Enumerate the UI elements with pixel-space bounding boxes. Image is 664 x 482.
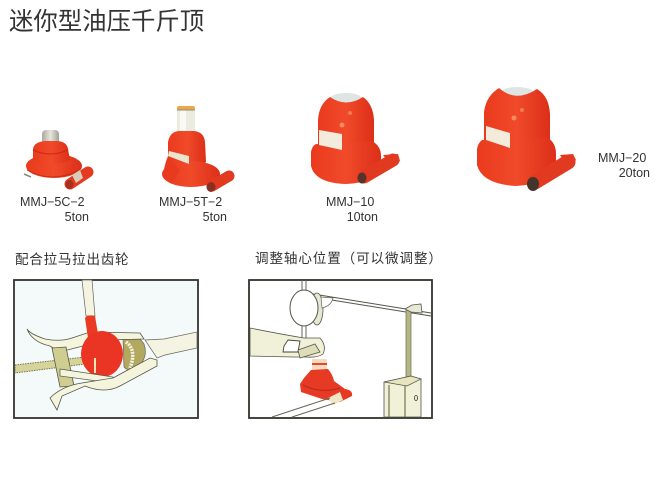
small red jack <box>300 359 352 405</box>
crossbar <box>60 369 113 383</box>
clamp <box>405 304 422 313</box>
shaft <box>145 332 197 358</box>
yoke <box>52 347 74 387</box>
label: MMJ-5C-2: 5ton <box>65 210 89 224</box>
threaded screw <box>15 357 85 373</box>
dial indicator rod <box>302 280 306 345</box>
arm and fixture <box>250 328 324 357</box>
label: MMJ-20: 20ton <box>619 166 650 180</box>
upper puller arm <box>27 329 144 352</box>
panel: axis adjustment illustration <box>249 280 432 418</box>
label: MMJ-20: MMJ−20 <box>598 151 646 165</box>
handle <box>82 280 95 316</box>
stand post <box>406 310 411 377</box>
jack: MMJ-5C-2 <box>24 130 88 189</box>
label: MMJ-5T-2 <box>159 195 227 224</box>
label: MMJ-10: 10ton <box>347 210 378 224</box>
base rail <box>272 398 335 417</box>
label: MMJ-10 <box>326 195 378 224</box>
caption: axis adjustment: 调整轴心位置（可以微调整） <box>255 251 443 266</box>
label: MMJ-5T-2: MMJ−5T−2 <box>159 195 222 209</box>
label: MMJ-5C-2: MMJ−5C−2 <box>20 195 85 209</box>
label: MMJ-5C-2 <box>20 195 89 224</box>
title: 迷你型油压千斤顶 <box>9 8 204 36</box>
stand block <box>384 376 421 417</box>
jack: MMJ-5T-2 <box>162 106 229 192</box>
label: MMJ-20 <box>598 151 650 180</box>
label: MMJ-5T-2: 5ton <box>203 210 227 224</box>
panel: gear puller illustration <box>14 280 198 418</box>
lower puller arm <box>50 358 157 410</box>
label: MMJ-10: MMJ−10 <box>326 195 374 209</box>
red jack head <box>85 315 98 342</box>
caption: gear puller: 配合拉马拉出齿轮 <box>15 252 129 267</box>
jack: MMJ-20 <box>477 87 576 191</box>
jack: MMJ-10 <box>311 93 400 184</box>
dial gauge <box>290 290 333 326</box>
red jack body <box>81 331 123 377</box>
lever rod <box>313 294 431 316</box>
gear <box>123 336 145 370</box>
